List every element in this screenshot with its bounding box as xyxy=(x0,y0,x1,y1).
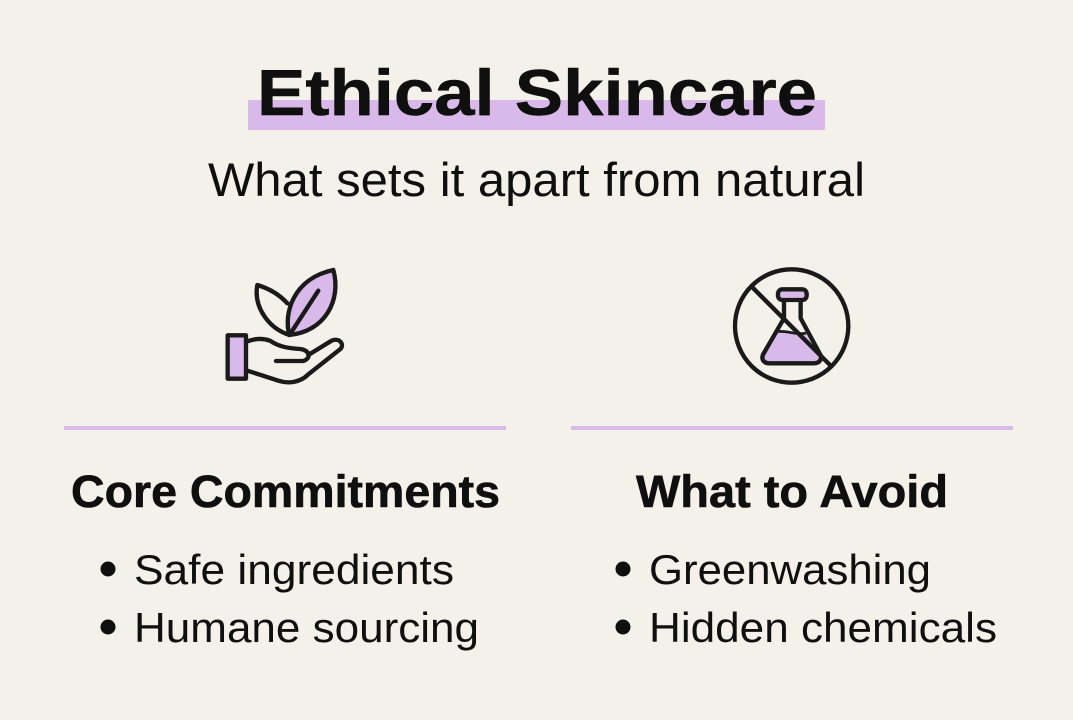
rule: what to avoid xyxy=(571,426,1013,430)
list: core commitments: Humane sourcing xyxy=(134,604,479,651)
list: what to avoid xyxy=(616,546,997,651)
subtitle: What sets it apart from natural xyxy=(208,153,865,206)
panel: core commitments xyxy=(64,270,506,651)
title: Ethical Skincare xyxy=(257,56,817,129)
list: what to avoid: Greenwashing xyxy=(649,546,931,593)
heading: what to avoid: What to Avoid xyxy=(636,466,948,517)
heading: core commitments: Core Commitments xyxy=(71,466,500,517)
list: core commitments: Safe ingredients xyxy=(134,546,454,593)
panel: what to avoid xyxy=(571,269,1013,651)
list: what to avoid: Hidden chemicals xyxy=(649,604,997,651)
rule: core commitments xyxy=(64,426,506,430)
list: core commitments xyxy=(100,546,479,651)
icon: hand holding leaves xyxy=(228,270,342,382)
icon: crossed-out flask xyxy=(735,269,848,383)
